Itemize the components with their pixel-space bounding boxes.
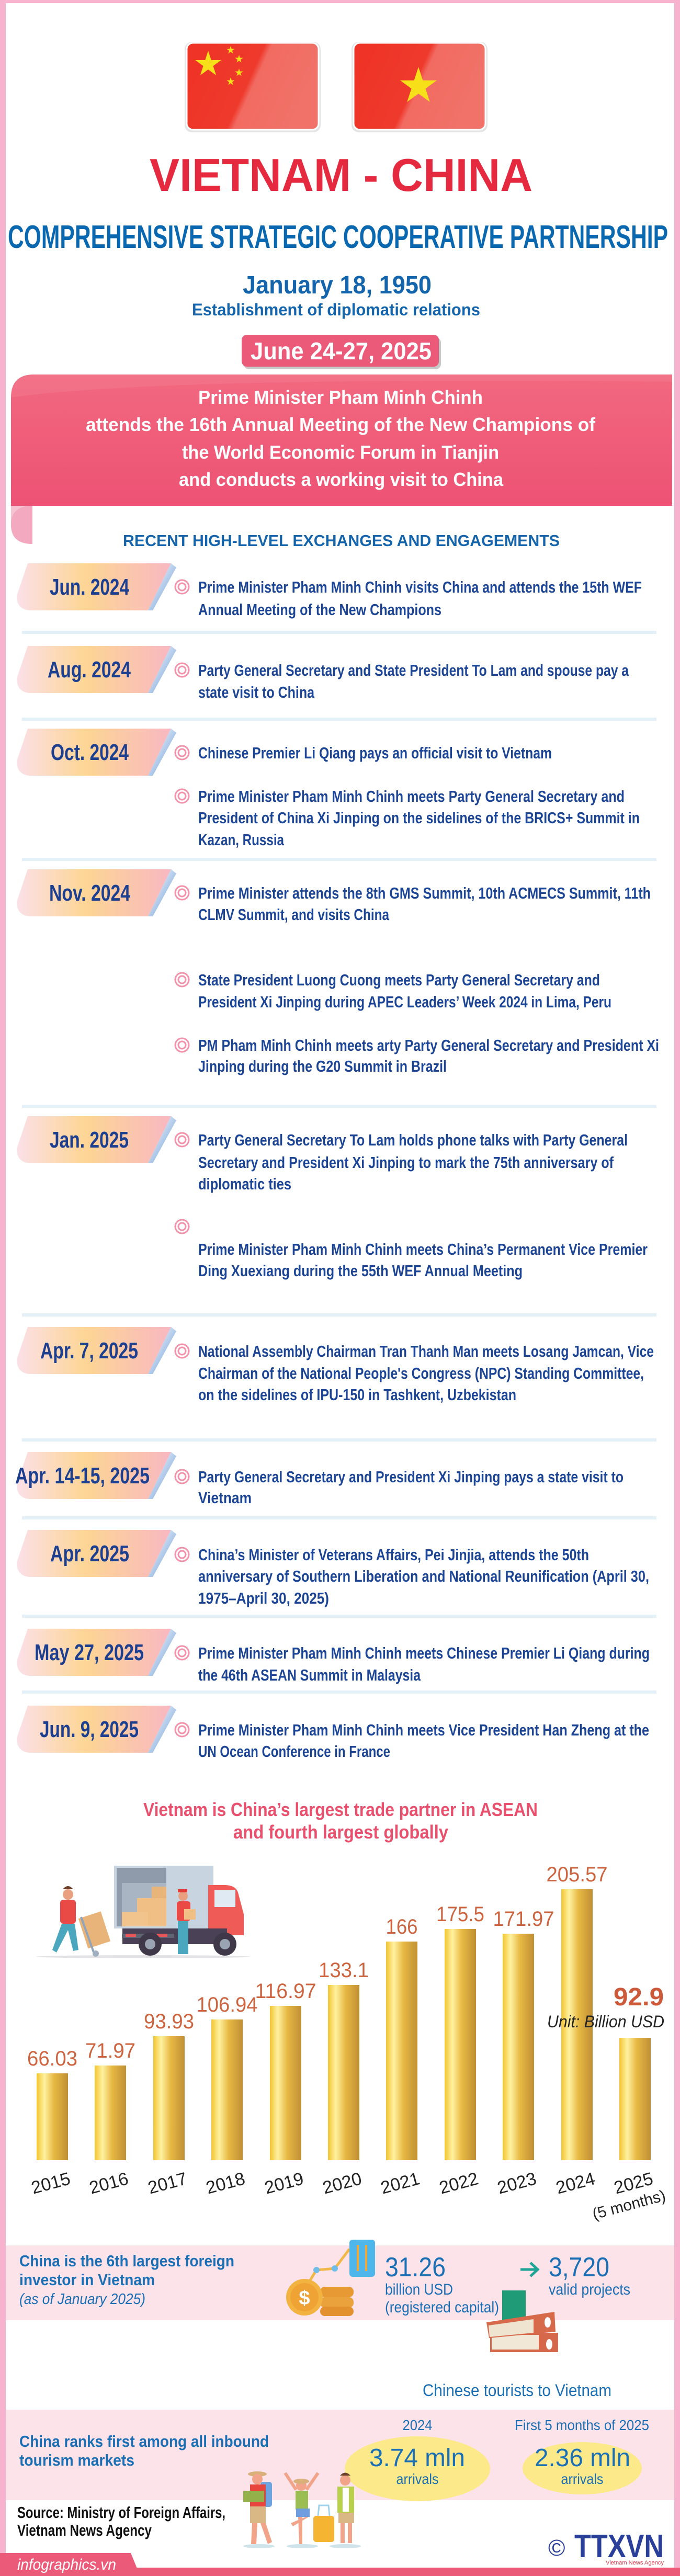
stat: 2024 arrivals: 3.74 mln <box>369 2444 465 2472</box>
entry: Jun. 9, 2025: UN Ocean Conference in France <box>198 1742 390 1761</box>
panel: tourism: 2024 <box>403 2417 432 2433</box>
bar chart: trade turnover: 2023 <box>495 2169 539 2198</box>
entry: Apr. 2025: 1975–April 30, 2025) <box>198 1589 329 1607</box>
flags <box>185 42 488 132</box>
icon: coins and chart: $ <box>299 2287 310 2309</box>
entry: Apr. 2025 <box>17 1530 649 1607</box>
entry: Jan. 2025: diplomatic ties <box>198 1175 291 1193</box>
man with cart <box>78 1911 110 1948</box>
panel: investment: billion USD <box>385 2281 453 2298</box>
panel: investment: 3,720 <box>549 2252 609 2283</box>
entry: Nov. 2024: Nov. 2024 <box>49 880 130 906</box>
date of diplomatic relations: Establishment of diplomatic relations <box>192 300 480 319</box>
panel: investment: valid projects <box>549 2281 630 2298</box>
entry: Jun. 2024: Jun. 2024 <box>50 574 129 600</box>
heading: recent exchanges: RECENT HIGH-LEVEL EXCHANGES AND ENGAGEMENTS <box>123 531 560 550</box>
bar chart: trade turnover: (5 months) <box>591 2187 667 2223</box>
entry: Apr. 14-15, 2025 <box>15 1452 624 1507</box>
icon: binders <box>486 2290 558 2352</box>
bar chart: trade turnover: 71.97 <box>85 2039 135 2062</box>
bar chart: trade turnover: 106.94 <box>197 1993 257 2016</box>
entry: May 27, 2025: the 46th ASEAN Summit in Malaysia <box>198 1666 421 1684</box>
entry: Oct. 2024: Kazan, Russia <box>198 831 285 849</box>
entry: Apr. 7, 2025: Apr. 7, 2025 <box>40 1338 138 1364</box>
banner: visit: attends the 16th Annual Meeting of the New Champions of <box>86 414 596 435</box>
banner: visit <box>11 375 672 544</box>
bar chart: trade turnover: 2020 <box>321 2169 364 2198</box>
icon: coins and chart <box>286 2240 375 2316</box>
chart title: and fourth largest globally <box>233 1821 448 1843</box>
entry: Oct. 2024 <box>17 729 640 849</box>
bar chart: trade turnover: 2025 <box>612 2169 655 2198</box>
bar chart: trade turnover: 205.57 <box>546 1863 608 1886</box>
entry: Apr. 2025: China’s Minister of Veterans Affairs, Pei Jinjia, attends the 50th <box>198 1546 589 1564</box>
bar chart: trade turnover: 2019 <box>263 2169 306 2198</box>
panel: investment: (registered capital) <box>385 2299 499 2316</box>
panel: tourism: Chinese tourists to Vietnam <box>423 2381 611 2400</box>
stat: 2025 arrivals: 2.36 mln <box>535 2444 630 2472</box>
banner: visit: and conducts a working visit to China <box>179 469 504 490</box>
stat: 2025 arrivals <box>523 2442 642 2494</box>
source <box>17 2503 225 2539</box>
bar chart: trade turnover: 175.5 <box>436 1903 484 1926</box>
bar chart: trade turnover <box>27 1863 667 2223</box>
bar chart: trade turnover: 166 <box>386 1915 417 1938</box>
entry: Jun. 2024: Annual Meeting of the New Champions <box>198 600 441 619</box>
bar chart: trade turnover: 2015 <box>29 2169 73 2198</box>
entry: Jan. 2025: Jan. 2025 <box>50 1127 129 1153</box>
entry: Nov. 2024: CLMV Summit, and visits China <box>198 905 390 924</box>
bar chart: trade turnover: 2021 <box>379 2169 422 2198</box>
logo: TTXVN: TTXVN <box>574 2528 664 2564</box>
entry: May 27, 2025 <box>17 1629 650 1684</box>
bar chart: trade turnover: 66.03 <box>27 2047 77 2070</box>
panel: tourism <box>6 2381 674 2548</box>
footer <box>0 2553 680 2576</box>
entry: Jan. 2025 <box>17 1116 648 1280</box>
footer: infographics.vn <box>17 2556 116 2573</box>
panel: tourism: tourism markets <box>19 2451 134 2469</box>
bar chart: trade turnover: 2016 <box>87 2169 131 2198</box>
arrow <box>520 2263 538 2276</box>
stat: 2024 arrivals <box>345 2436 490 2501</box>
title: VIETNAM - CHINA <box>150 149 532 201</box>
entry: Oct. 2024: Chinese Premier Li Qiang pays an official visit to Vietnam <box>198 744 552 762</box>
date of diplomatic relations: January 18, 1950 <box>243 271 432 299</box>
bar chart: trade turnover: 171.97 <box>493 1908 554 1931</box>
entry: Jan. 2025: Ding Xuexiang during the 55th WEF Annual Meeting <box>198 1262 523 1280</box>
entry: May 27, 2025: May 27, 2025 <box>35 1640 144 1665</box>
panel: tourism: First 5 months of 2025 <box>515 2417 649 2433</box>
entry: Apr. 14-15, 2025: Vietnam <box>198 1489 252 1507</box>
chart title <box>143 1799 538 1843</box>
banner: visit: Prime Minister Pham Minh Chinh <box>198 387 483 408</box>
date badge: June 24-27, 2025 <box>251 337 432 365</box>
bar chart: trade turnover: 92.9 <box>614 1983 664 2011</box>
entry: Apr. 14-15, 2025: Apr. 14-15, 2025 <box>15 1463 150 1489</box>
panel: investment: investor in Vietnam <box>19 2271 155 2289</box>
flag: Vietnam <box>352 42 488 132</box>
logo: TTXVN: Vietnam News Agency <box>606 2560 664 2566</box>
bar chart: trade turnover: 116.97 <box>255 1980 316 2003</box>
entry: Jun. 2024 <box>17 563 642 619</box>
panel: investment <box>6 2240 674 2352</box>
bar chart: trade turnover: 2018 <box>204 2169 247 2198</box>
entry: Jun. 9, 2025 <box>17 1706 649 1761</box>
entry: Aug. 2024: state visit to China <box>198 683 315 701</box>
bar chart: trade turnover: 2022 <box>437 2169 481 2198</box>
timeline <box>15 563 659 1761</box>
entry: Apr. 7, 2025 <box>17 1327 654 1404</box>
logo: TTXVN <box>548 2528 664 2566</box>
entry: Apr. 2025: Apr. 2025 <box>50 1541 129 1567</box>
logo: TTXVN: © <box>548 2535 565 2561</box>
source: Source: Ministry of Foreign Affairs, <box>17 2503 225 2522</box>
man with box <box>178 1891 188 1901</box>
bar chart: trade turnover: 2017 <box>146 2169 189 2198</box>
entry: Aug. 2024 <box>17 646 629 701</box>
panel: investment: 31.26 <box>385 2252 446 2283</box>
panel: investment: (as of January 2025) <box>19 2291 145 2308</box>
illustration: delivery truck <box>36 1866 251 1958</box>
entry: Oct. 2024: Oct. 2024 <box>51 740 129 765</box>
entry: Aug. 2024: Aug. 2024 <box>48 657 131 683</box>
entry: Jun. 9, 2025: Jun. 9, 2025 <box>40 1717 139 1742</box>
panel: tourism: China ranks first among all inbound <box>19 2432 269 2450</box>
banner: visit: the World Economic Forum in Tianjin <box>182 441 499 463</box>
bar chart: trade turnover: 133.1 <box>319 1959 369 1982</box>
flag: China <box>185 42 321 132</box>
entry: Apr. 7, 2025: on the sidelines of IPU-150 in Tashkent, Uzbekistan <box>198 1386 516 1404</box>
chart title: Vietnam is China’s largest trade partner in ASEAN <box>143 1799 538 1820</box>
stat: 2024 arrivals: arrivals <box>396 2471 438 2487</box>
entry: Nov. 2024: Jinping during the G20 Summit in Brazil <box>198 1057 447 1075</box>
bar chart: trade turnover: Unit: Billion USD <box>547 2012 664 2031</box>
stat: 2025 arrivals: arrivals <box>561 2471 604 2487</box>
bar chart: trade turnover: 2024 <box>554 2169 597 2198</box>
bar chart: trade turnover: 93.93 <box>144 2010 194 2033</box>
illustration: tourists <box>243 2471 361 2548</box>
source: Vietnam News Agency <box>17 2521 152 2539</box>
date of diplomatic relations <box>192 271 480 319</box>
panel: investment: China is the 6th largest foreign <box>19 2252 234 2270</box>
entry: Nov. 2024 <box>17 869 659 1075</box>
